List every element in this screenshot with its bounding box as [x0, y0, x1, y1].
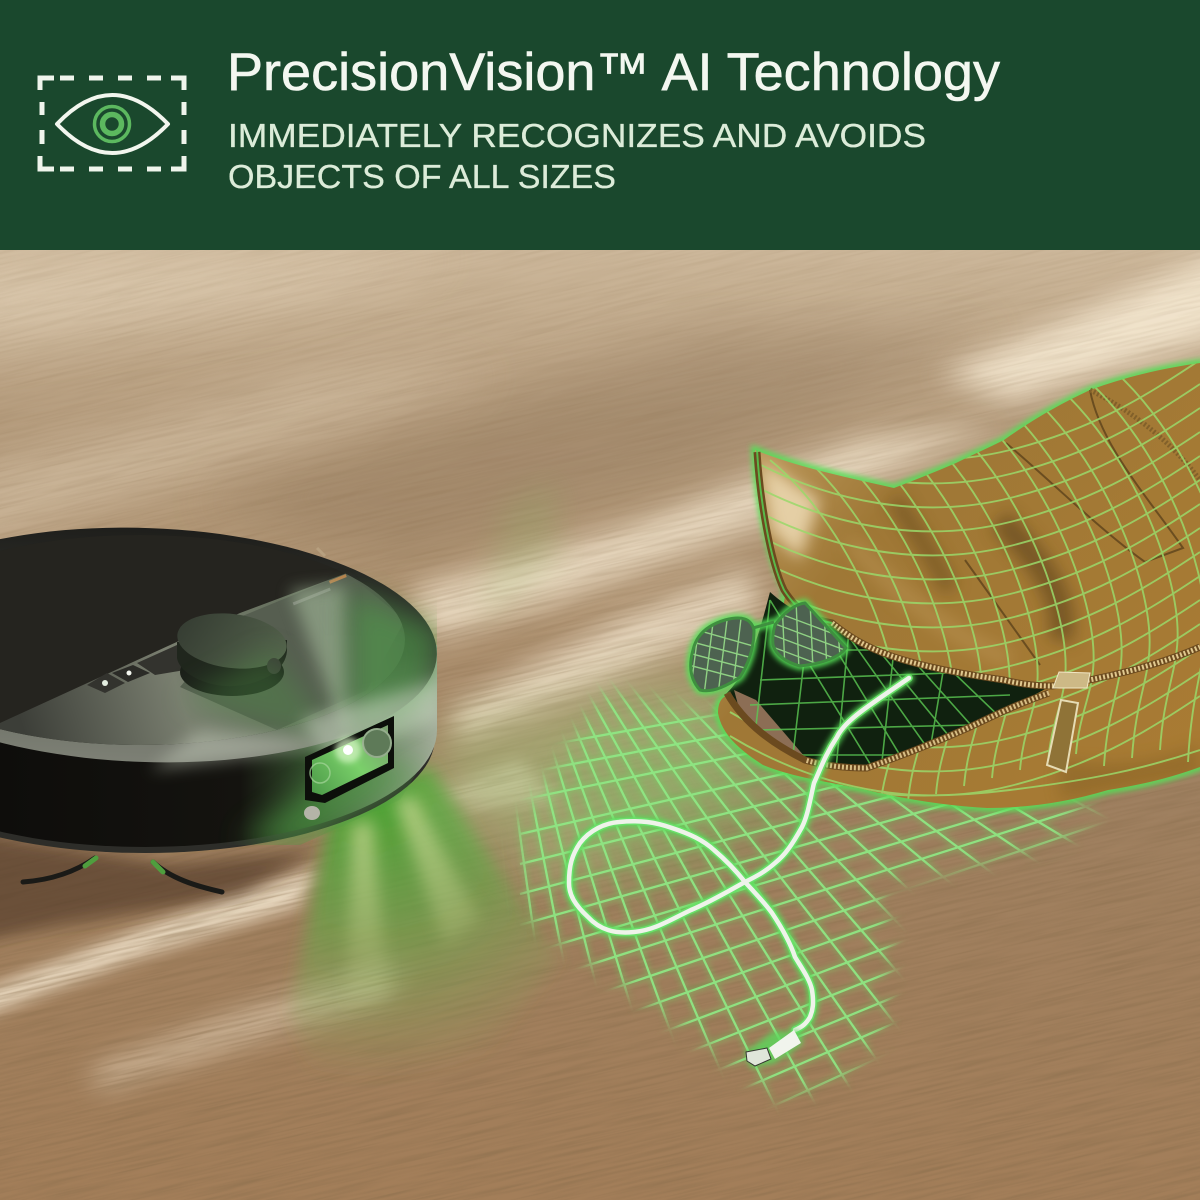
glasses glow	[691, 603, 846, 691]
cable glow	[569, 678, 909, 1030]
fabric shading	[760, 460, 1200, 800]
wood floor	[0, 245, 1200, 1200]
title: PrecisionVision™ AI Technology	[227, 43, 1001, 102]
body hull	[0, 613, 437, 847]
notch in bezel	[317, 548, 325, 556]
cable core	[569, 678, 909, 1030]
backpack	[718, 360, 1200, 810]
backpack interior	[727, 592, 1045, 764]
backpack fabric	[718, 363, 1200, 808]
lidar turret	[174, 607, 290, 696]
subtitle: IMMEDIATELY RECOGNIZES AND AVOIDS	[228, 117, 926, 154]
fabric wireframe mesh	[730, 360, 1200, 810]
top bezel	[0, 518, 441, 772]
lens grid	[692, 607, 844, 690]
control buttons	[87, 645, 185, 693]
USB-C connector	[745, 1030, 803, 1068]
frames	[691, 603, 846, 691]
base rim	[0, 621, 435, 853]
subtitle	[228, 117, 926, 195]
icon: eye in dashed frame	[40, 78, 184, 169]
lenses	[691, 603, 846, 691]
robot shadow on floor	[0, 830, 320, 945]
subtitle: OBJECTS OF ALL SIZES	[228, 158, 616, 195]
side brushes	[23, 858, 222, 892]
floor shadow band	[200, 330, 1000, 560]
sunglasses	[685, 600, 850, 695]
zippers	[727, 450, 1200, 768]
top panel	[0, 574, 405, 745]
zipper pull	[1047, 672, 1090, 772]
green glow on robot	[150, 585, 440, 850]
backpack glow outline	[718, 363, 1200, 808]
grid glow	[518, 694, 1087, 1099]
front sensor window	[304, 716, 394, 820]
pocket seams	[965, 390, 1200, 665]
grid lines	[516, 685, 1102, 1106]
header banner	[0, 0, 1200, 250]
green light beams on floor	[290, 480, 800, 1100]
logo mark	[293, 574, 347, 605]
floor scan grid	[516, 684, 1102, 1108]
robot vacuum	[0, 518, 441, 892]
charging cable	[569, 678, 909, 1030]
wood grain	[0, 250, 1200, 1200]
sunlight streaks	[0, 245, 1200, 1090]
